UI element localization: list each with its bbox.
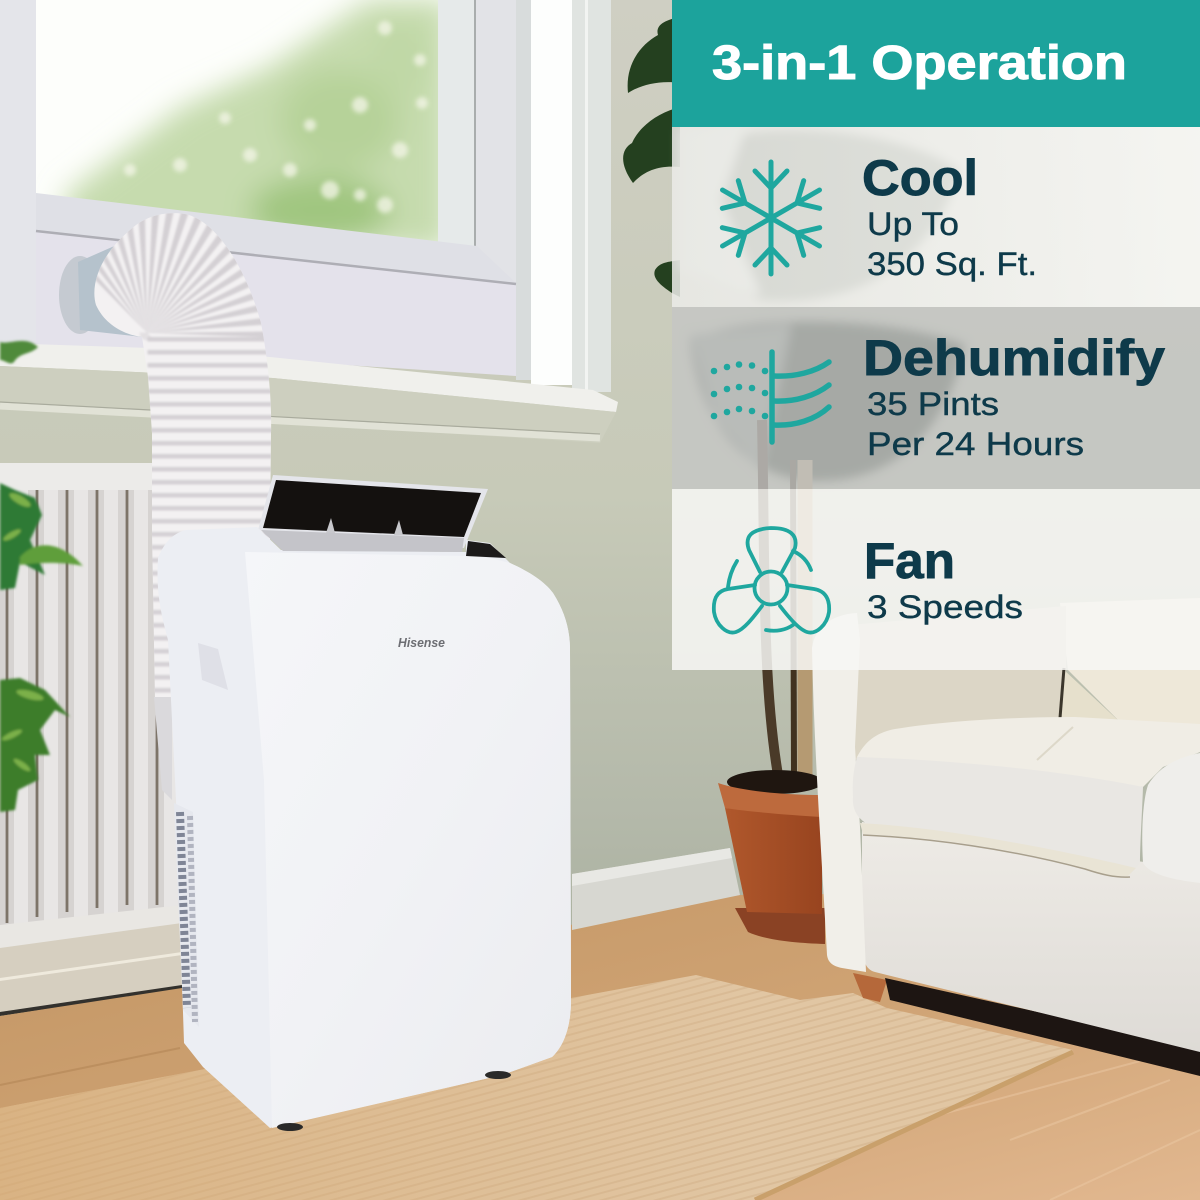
rug [0, 975, 1073, 1200]
right top vent opening [466, 541, 506, 558]
window sill [0, 343, 618, 412]
text: Per 24 Hours: Per 24 Hours [867, 426, 1084, 462]
side handle [198, 643, 228, 690]
window [0, 0, 618, 443]
sill apron [0, 366, 616, 443]
text: 35 Pints: 35 Pints [867, 386, 999, 422]
floor shadow under sofa [885, 978, 1200, 1076]
wheels [277, 1071, 511, 1131]
flexible exhaust hose [94, 213, 272, 697]
radiator fin gaps [7, 490, 157, 923]
window glass with foliage [35, 0, 450, 250]
title: 3-in-1 Operation [712, 37, 1127, 90]
sofa base [862, 822, 1200, 1052]
window frame right mullions [438, 0, 611, 392]
heading: Fan: Fan [864, 533, 955, 589]
unit front panel [245, 552, 571, 1128]
hose lower section [154, 697, 172, 800]
blurred monstera leaves [680, 125, 965, 481]
text: 3 Speeds: 3 Speeds [867, 589, 1023, 625]
plant behind the panel [623, 17, 965, 775]
exhaust adapter ring [59, 240, 142, 337]
heading: Cool: Cool [862, 150, 978, 206]
portable air conditioner [157, 475, 571, 1131]
sofa [812, 598, 1200, 1076]
seat cushion left [853, 717, 1200, 877]
text: Up To: Up To [867, 206, 959, 242]
flap fins [326, 518, 335, 533]
floor board streaks [0, 1045, 1200, 1200]
left plant [0, 341, 83, 812]
sofa foot [853, 973, 887, 1002]
radiator base [0, 923, 182, 1012]
flap dark interior [263, 480, 481, 537]
sofa back recess [850, 606, 1066, 760]
floor [0, 890, 1200, 1200]
unit side and front body [157, 527, 571, 1128]
lower rail of sash [36, 193, 516, 283]
open top flap [258, 475, 488, 548]
row: dehumidify [672, 307, 1200, 489]
window frame left [0, 0, 36, 345]
text: 350 Sq. Ft.: 350 Sq. Ft. [867, 246, 1037, 282]
icon: snowflake [715, 162, 827, 274]
plant leaves beside panel [623, 17, 680, 297]
row: cool [672, 127, 1200, 307]
side intake grille [174, 803, 199, 1027]
icon: fan [714, 528, 829, 633]
sofa arm [812, 613, 866, 972]
radiator [0, 463, 182, 1016]
icon: dehumidify [711, 352, 829, 442]
right baseboard [572, 848, 740, 930]
heading: Dehumidify: Dehumidify [863, 330, 1165, 386]
top vent tray [261, 530, 464, 552]
seat cushion right [1142, 753, 1200, 883]
panel header [672, 0, 1200, 127]
terracotta pot [718, 770, 825, 944]
row: fan [672, 489, 1200, 670]
insert panel below the sash [36, 230, 516, 376]
info panel [672, 0, 1200, 670]
plant stems [762, 420, 805, 775]
sofa back upper [1060, 598, 1200, 735]
Hisense logo: Hisense [398, 635, 445, 650]
